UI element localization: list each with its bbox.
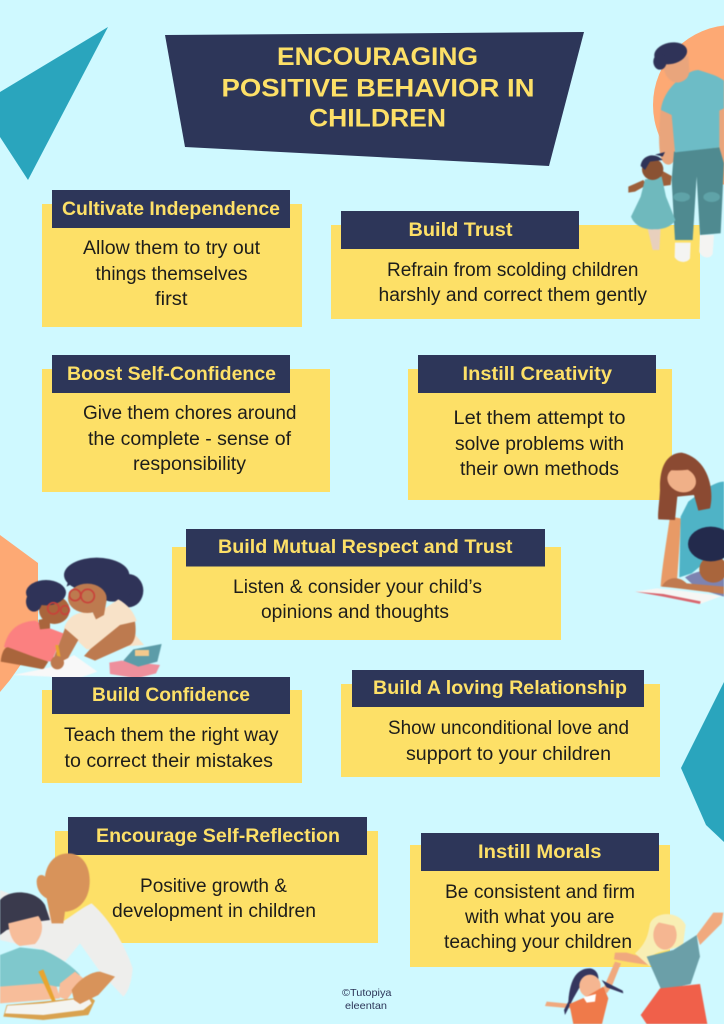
panel: build a loving relationship: Show unconditional love and xyxy=(388,718,629,739)
panel: boost self-confidence xyxy=(42,355,330,492)
illustration: mother and daughter dancing xyxy=(545,913,723,1024)
panel: boost self-confidence: Boost Self-Confidence xyxy=(67,364,276,385)
panel: cultivate independence: Cultivate Independence xyxy=(62,199,280,220)
panel: instill morals xyxy=(410,833,670,967)
panel: cultivate independence: Allow them to try out xyxy=(83,238,261,259)
panel: instill morals: with what you are xyxy=(464,907,614,928)
panel: build trust xyxy=(331,211,700,319)
title banner: POSITIVE BEHAVIOR IN xyxy=(222,74,534,102)
peach circle behind father xyxy=(653,25,724,185)
panel: build mutual respect and trust: Build Mutual Respect and Trust xyxy=(218,537,513,558)
panel: build confidence xyxy=(42,677,302,783)
panel: cultivate independence xyxy=(42,190,302,327)
panel: build mutual respect and trust: Listen & consider your child’s xyxy=(233,577,482,598)
panel: encourage self-reflection: Positive growth & xyxy=(140,876,287,897)
credit line: ©Tutopiya xyxy=(342,987,392,999)
panel: boost self-confidence: Give them chores around xyxy=(83,403,296,424)
credit line: eleentan xyxy=(345,1000,387,1012)
panel: build confidence: Build Confidence xyxy=(92,685,250,706)
title banner xyxy=(165,32,584,166)
panel: boost self-confidence: responsibility xyxy=(133,454,247,475)
panel: instill creativity: Instill Creativity xyxy=(462,364,612,385)
panel: instill morals: Instill Morals xyxy=(478,842,602,863)
panel: encourage self-reflection xyxy=(55,817,378,943)
peach hexagon shape left xyxy=(0,535,38,692)
panel: build mutual respect and trust: opinions and thoughts xyxy=(261,602,449,623)
panel: build a loving relationship: support to your children xyxy=(406,744,611,765)
panel: encourage self-reflection: Encourage Self-Reflection xyxy=(96,826,340,847)
panel: encourage self-reflection: development in children xyxy=(112,901,316,922)
teal shape right xyxy=(681,682,724,842)
title banner: CHILDREN xyxy=(309,104,446,132)
panel: instill creativity: their own methods xyxy=(460,459,619,480)
panel: cultivate independence: first xyxy=(155,289,188,310)
panel: build a loving relationship xyxy=(341,670,660,777)
panel: boost self-confidence: the complete - sense of xyxy=(88,429,292,450)
panel: build mutual respect and trust xyxy=(172,529,561,640)
panel: build confidence: Teach them the right way xyxy=(64,725,279,746)
teal triangle shape top left xyxy=(0,27,108,180)
panel: build trust: Refrain from scolding children xyxy=(387,260,638,281)
panel: build confidence: to correct their mistakes xyxy=(64,751,273,772)
illustration: father and son with book xyxy=(0,853,133,1020)
credit line xyxy=(342,987,392,1012)
panel: instill morals: Be consistent and firm xyxy=(445,882,635,903)
illustration: father and child walking xyxy=(628,39,724,262)
panel: build trust: harshly and correct them gently xyxy=(378,285,648,306)
panel: instill creativity xyxy=(408,355,672,500)
illustration: girl and boy studying xyxy=(1,558,162,683)
illustration: teacher and child reading xyxy=(635,453,724,604)
panel: instill morals: teaching your children xyxy=(444,932,632,953)
title banner: ENCOURAGING xyxy=(277,43,478,71)
panel: instill creativity: Let them attempt to xyxy=(454,408,626,429)
panel: build a loving relationship: Build A loving Relationship xyxy=(373,678,627,699)
panel: build trust: Build Trust xyxy=(408,220,513,241)
panel: instill creativity: solve problems with xyxy=(455,434,624,455)
panel: cultivate independence: things themselves xyxy=(96,264,248,285)
